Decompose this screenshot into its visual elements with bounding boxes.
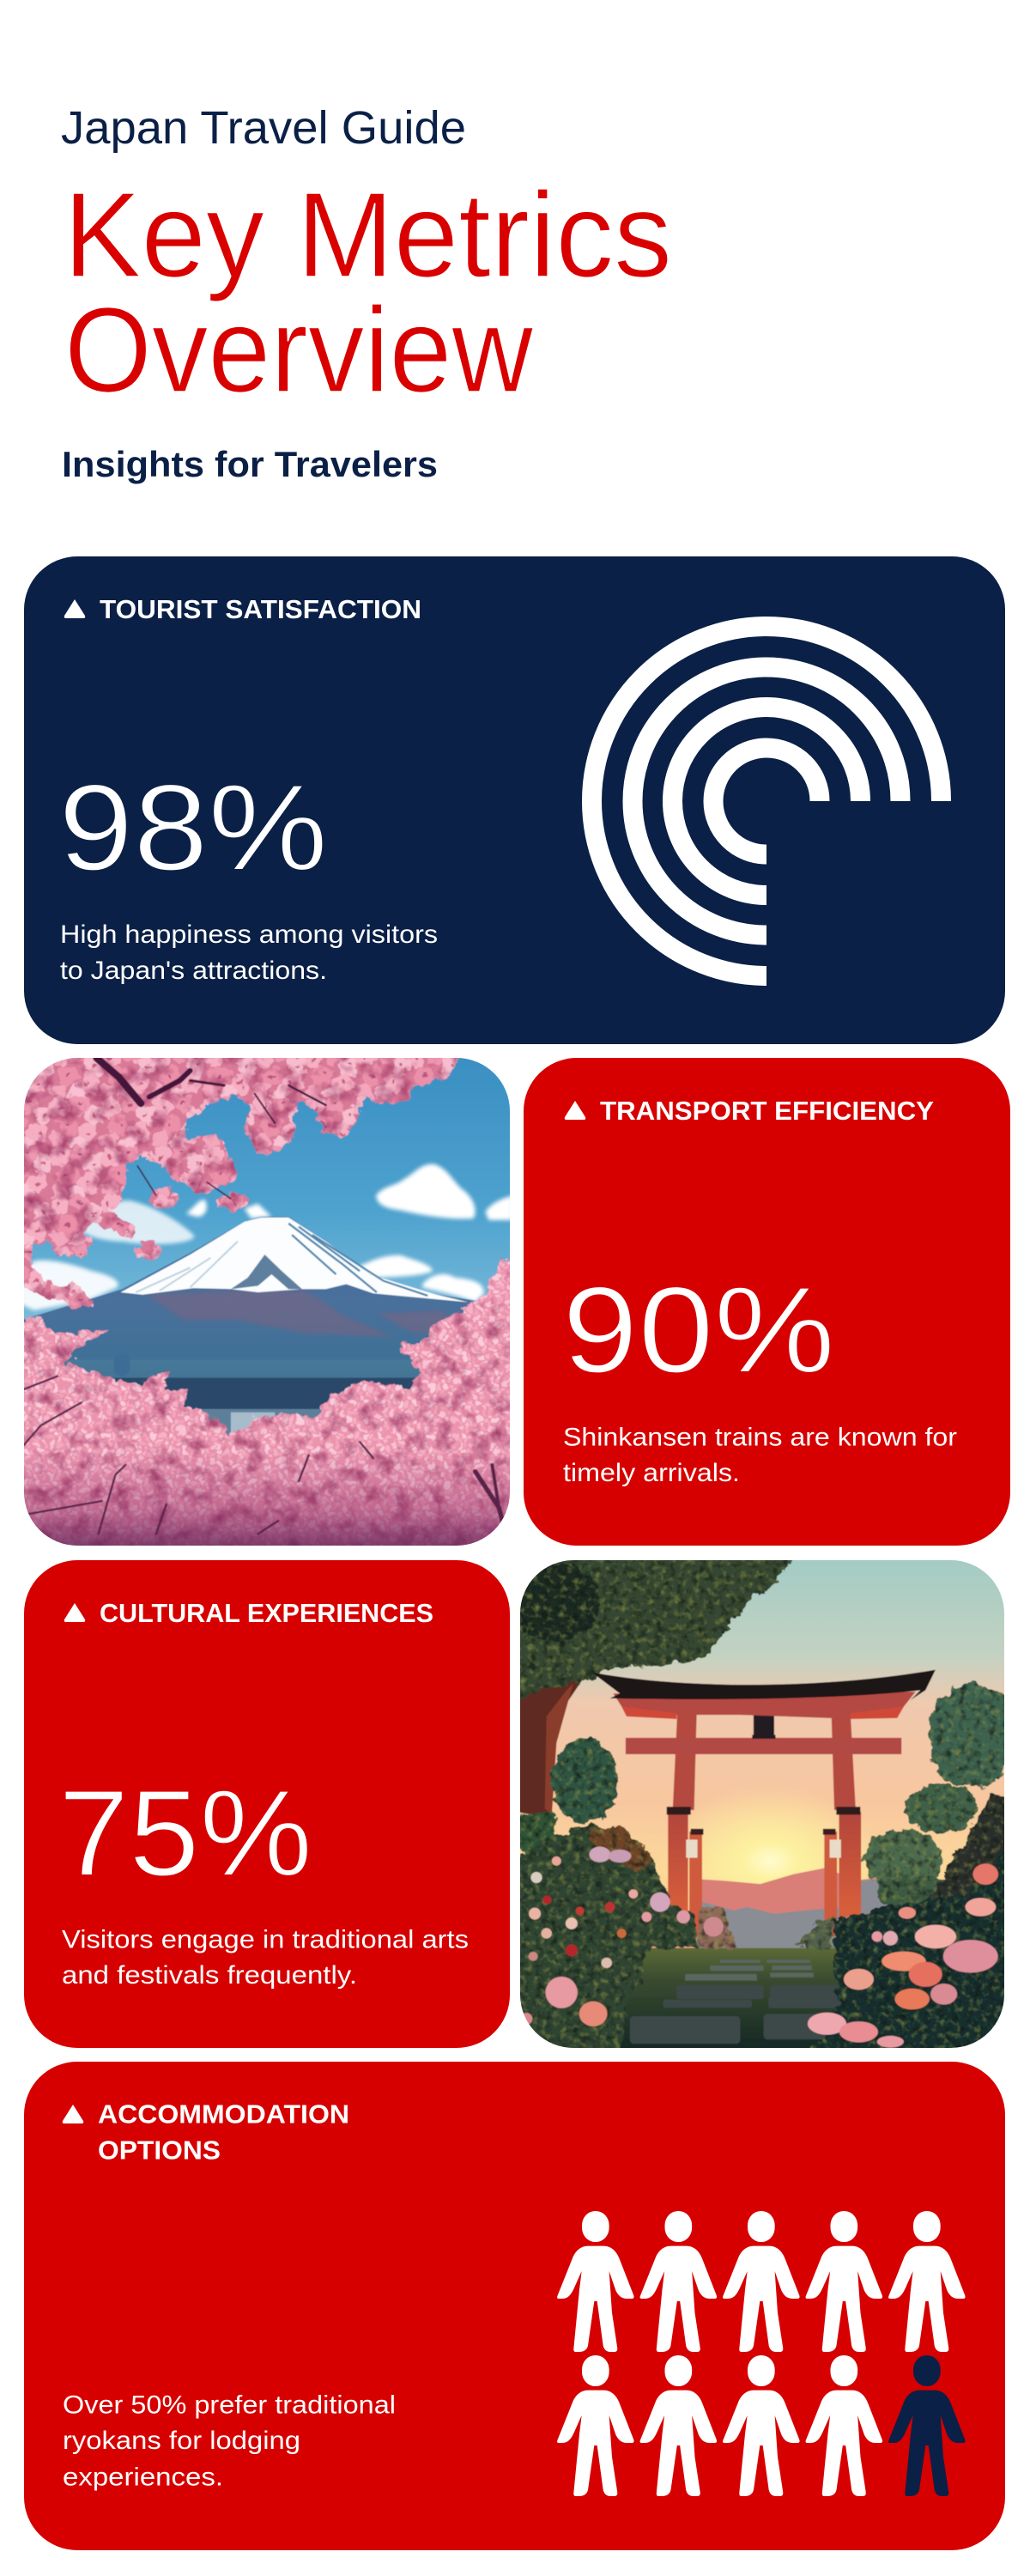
lower blossom trees (14, 1258, 519, 1553)
description: ryokans: Over 50% prefer traditional (63, 2391, 396, 2420)
title: Key Metrics Overview: Overview (64, 282, 534, 417)
icon: triangle bullet (64, 599, 85, 618)
icon: triangle bullet (63, 2105, 83, 2123)
description: high happiness: to Japan's attractions. (60, 957, 327, 985)
icon: triangle bullet (565, 1101, 585, 1120)
stat: 75%: 75% (58, 1765, 312, 1902)
grass and stone path (583, 1947, 945, 2048)
description: visitors engage (62, 1925, 469, 1990)
description: shinkansen: Shinkansen trains are known for (563, 1424, 957, 1451)
description: visitors engage: Visitors engage in traditional arts (62, 1925, 469, 1954)
label: tourist satisfaction: TOURIST SATISFACTION (100, 594, 421, 624)
distant mountains (701, 1868, 877, 1915)
description: high happiness (60, 920, 438, 985)
stat: 90%: 90% (562, 1262, 835, 1399)
panel: transport efficiency (524, 1058, 1010, 1546)
eyebrow: Japan Travel Guide: Japan Travel Guide (61, 102, 466, 154)
panel: tourist satisfaction (24, 556, 1005, 1044)
label: accommodation options (98, 2099, 349, 2166)
label: accommodation options: ACCOMMODATION (98, 2099, 349, 2129)
title: Key Metrics Overview: Key Metrics (64, 167, 672, 302)
left tree crown and trunk (520, 1680, 582, 1815)
subtitle: Insights for Travelers: Insights for Travelers (62, 444, 438, 484)
torii rear pillars (689, 1832, 702, 1936)
icon: triangle bullet (64, 1603, 85, 1622)
stat: 98%: 98% (58, 760, 328, 896)
flowering bushes (513, 1825, 1014, 2051)
photo: torii gate at sunset (513, 1552, 1014, 2051)
description: ryokans: ryokans for lodging (63, 2427, 300, 2455)
description: shinkansen: timely arrivals. (563, 1459, 740, 1487)
chart: concentric satisfaction arcs (592, 626, 941, 975)
branches (97, 1058, 326, 1199)
upper blossom canopy (14, 1051, 457, 1307)
torii main pillars (673, 1711, 697, 1810)
title: Key Metrics Overview (64, 167, 672, 417)
mountain body (24, 1216, 477, 1379)
pictogram: ten people, nine white and one navy (557, 2211, 966, 2496)
header: eyebrow, title and subtitle (61, 102, 672, 484)
torii crossbeam and plaque (626, 1738, 901, 1754)
description: ryokans: experiences. (63, 2463, 223, 2492)
description: ryokans (63, 2391, 396, 2492)
label: transport efficiency: TRANSPORT EFFICIENCY (600, 1096, 934, 1126)
lower shading (24, 1455, 510, 1546)
description: high happiness: High happiness among visitors (60, 920, 438, 949)
panel: cultural experiences (24, 1560, 510, 2048)
torii upper beam and roof (613, 1692, 916, 1718)
snow cap (120, 1218, 469, 1303)
photo: Mount Fuji with cherry blossoms (14, 1051, 519, 1553)
right trees (927, 1684, 1014, 1789)
label: cultural experiences: CULTURAL EXPERIENCES (100, 1598, 433, 1628)
panel: accommodation options (24, 2062, 1005, 2550)
label: accommodation options: OPTIONS (98, 2135, 221, 2166)
lower plain (65, 1360, 421, 1377)
description: visitors engage: and festivals frequently. (62, 1961, 357, 1990)
description: shinkansen (563, 1424, 957, 1487)
